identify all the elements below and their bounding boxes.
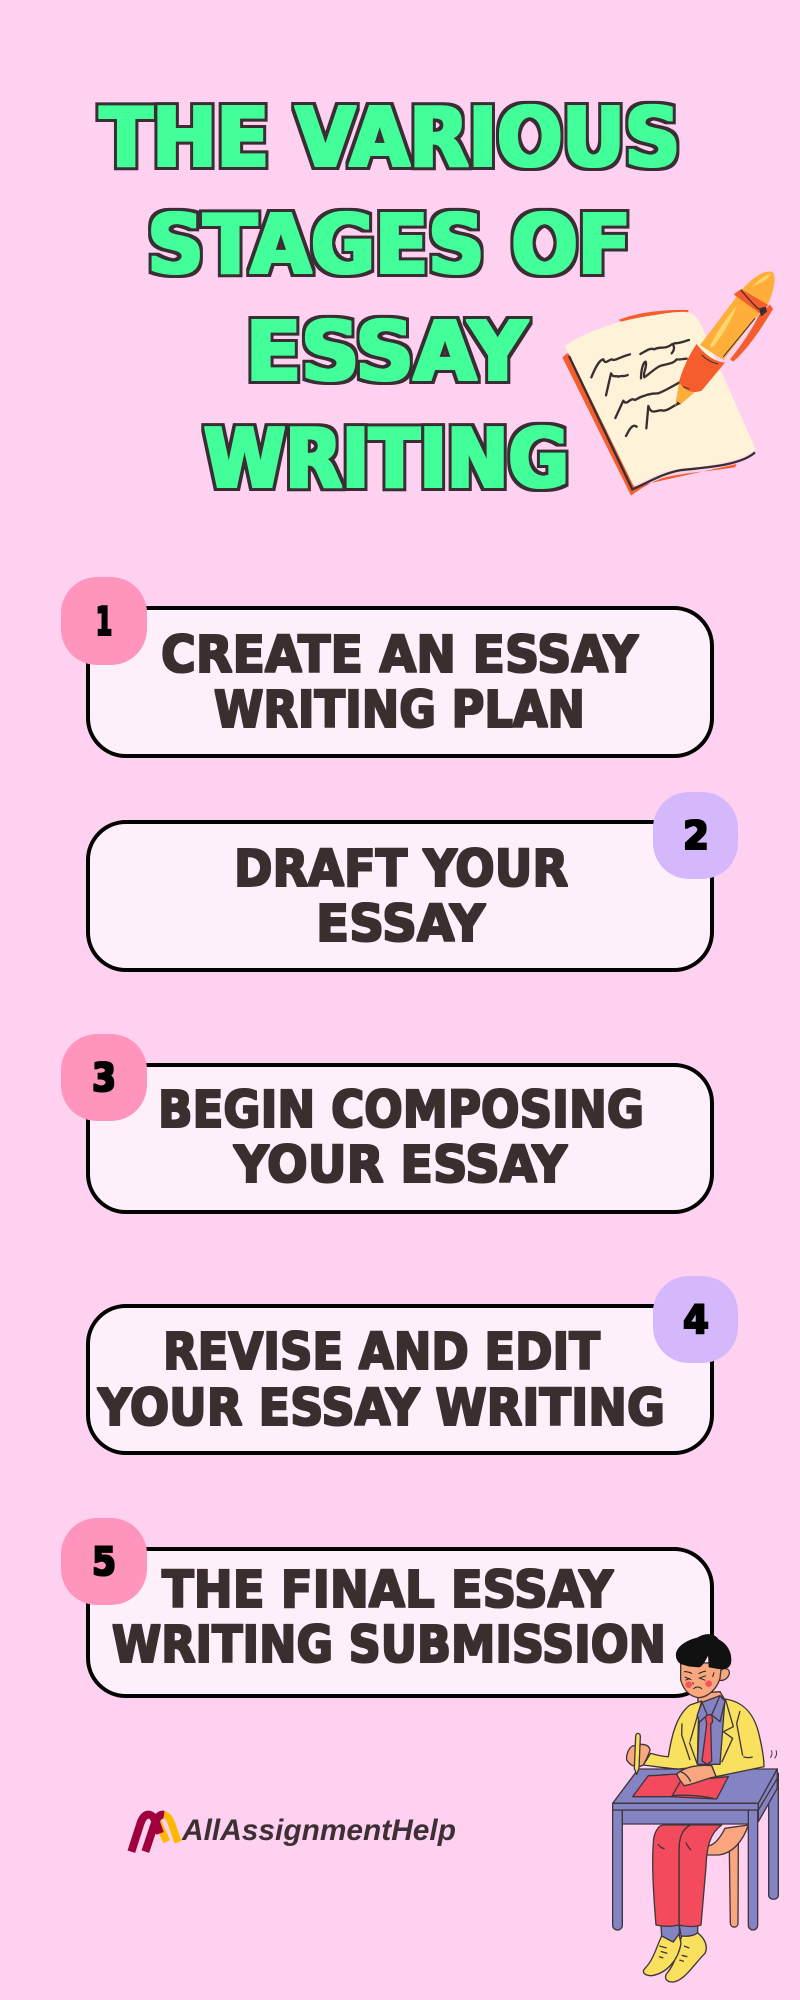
panel: step 4	[88, 1276, 738, 1453]
cheeks	[685, 1681, 692, 1688]
facial features	[684, 1671, 714, 1689]
pencil	[634, 1733, 640, 1774]
badge 4	[653, 1276, 738, 1363]
step 1 text: WRITING PLAN	[214, 681, 585, 740]
pen grip	[679, 344, 725, 392]
title: WRITING	[204, 412, 569, 507]
shirt	[697, 1696, 725, 1765]
tie	[702, 1714, 713, 1764]
logo mark	[131, 1815, 178, 1852]
step 4 text: REVISE AND EDIT	[163, 1323, 600, 1382]
icon: notebook and pen	[562, 271, 775, 496]
step 2 text	[234, 840, 568, 954]
title	[100, 91, 680, 507]
red book	[633, 1774, 728, 1799]
step 5 text: WRITING SUBMISSION	[112, 1616, 666, 1675]
face	[681, 1662, 722, 1698]
step 5 text	[112, 1561, 666, 1675]
step 3 text	[158, 1081, 644, 1195]
hand on book	[677, 1765, 716, 1786]
handwriting	[591, 340, 689, 436]
step 1 text	[161, 626, 639, 740]
badge 3	[61, 1034, 147, 1121]
jacket	[643, 1699, 764, 1777]
pen body	[700, 271, 775, 360]
badge 5	[61, 1518, 147, 1605]
badge 1	[61, 577, 147, 665]
step 4 text: YOUR ESSAY WRITING	[97, 1379, 665, 1438]
writing hand	[627, 1744, 650, 1767]
badge 5: 5	[92, 1540, 116, 1585]
panel: step 1	[61, 577, 712, 756]
lower body and desk legs	[613, 1773, 778, 1982]
upper body and desk top	[613, 1635, 777, 1822]
hair	[677, 1635, 731, 1669]
ear	[719, 1669, 729, 1680]
badge 2	[653, 792, 738, 879]
step 2 text: ESSAY	[316, 895, 486, 954]
step 2 text: DRAFT YOUR	[234, 840, 568, 899]
badge 4: 4	[683, 1298, 709, 1343]
logo wordmark: AllAssignmentHelp	[181, 1814, 456, 1847]
logo: AllAssignmentHelp	[131, 1814, 456, 1852]
step 3 text: YOUR ESSAY	[233, 1136, 568, 1195]
motion marks	[770, 1750, 777, 1758]
pen clip	[730, 304, 773, 362]
desk top	[613, 1769, 777, 1803]
title: STAGES OF	[148, 198, 631, 293]
step 1 text: CREATE AN ESSAY	[161, 626, 639, 685]
badge 2: 2	[683, 814, 709, 859]
neck	[697, 1692, 725, 1720]
panel: step 2	[88, 792, 738, 970]
title: ESSAY	[246, 305, 529, 400]
panel: step 5	[61, 1518, 712, 1696]
step 4 text	[97, 1323, 665, 1438]
pen tip	[675, 383, 694, 406]
panel: step 3	[61, 1034, 712, 1212]
badge 1: 1	[96, 600, 112, 645]
badge 3: 3	[92, 1056, 116, 1101]
step 3 text: BEGIN COMPOSING	[158, 1081, 644, 1140]
title: THE VARIOUS	[100, 91, 680, 186]
step 5 text: THE FINAL ESSAY	[162, 1561, 614, 1620]
illustration: student at desk	[613, 1635, 778, 1982]
